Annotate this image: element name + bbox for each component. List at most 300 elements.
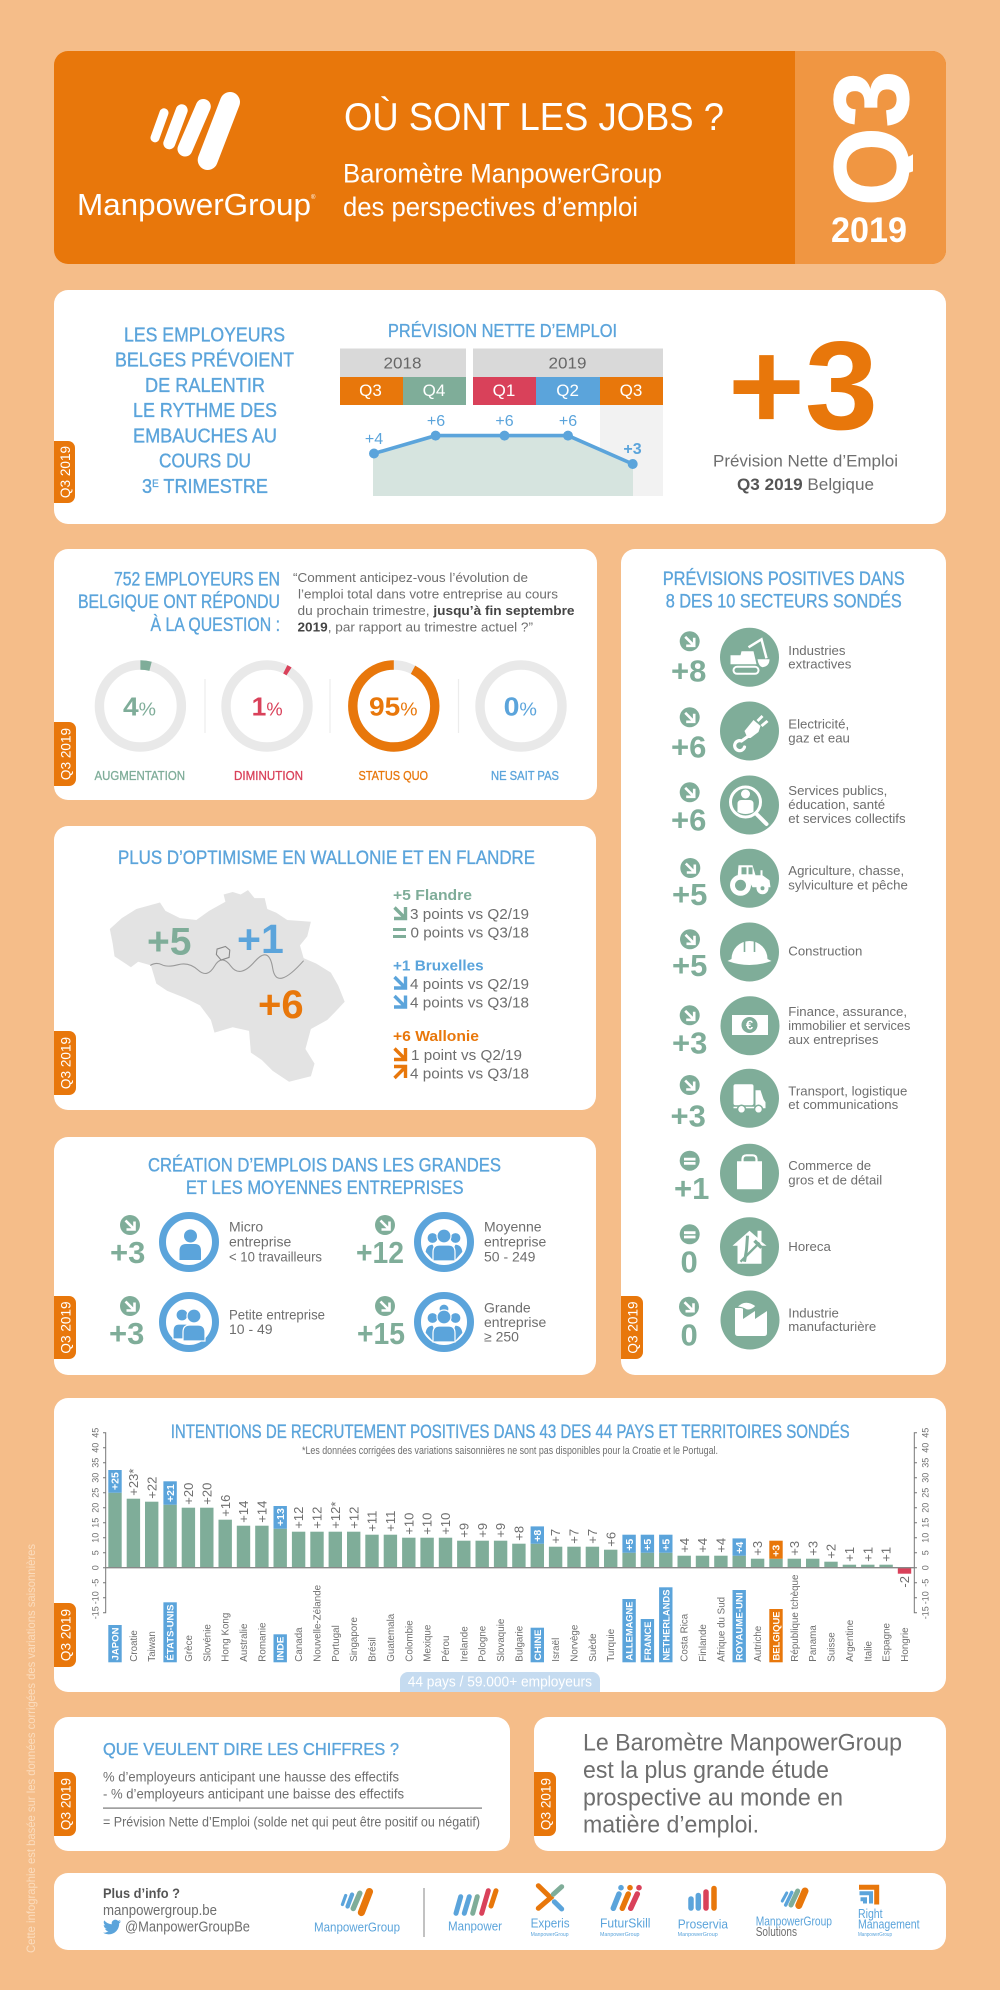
- bar: Autriche +3: [750, 1541, 765, 1662]
- tab: Q3 2019: [54, 1603, 76, 1667]
- title: OÙ SONT LES JOBS ?: [344, 96, 724, 139]
- logo: Right Management: ManpowerGroup: [858, 1932, 892, 1938]
- sector: Services publics: [671, 776, 906, 838]
- bar: Japon +25: [108, 1470, 122, 1662]
- panel: barometer statement: [534, 1717, 946, 1851]
- item: small enterprise +3: +3: [109, 1316, 144, 1351]
- bar: Hong Kong +16: Hong Kong: [221, 1613, 232, 1662]
- bar: Irelande +9: Irelande: [459, 1626, 470, 1662]
- left axis: 25: [90, 1488, 100, 1498]
- donut: augmentation 4%: [94, 665, 185, 783]
- sector: Industrie manufacturière: manufacturière: [788, 1319, 876, 1334]
- heading: employers slowing hiring: E: [152, 478, 159, 490]
- line chart with quarter table: 2019: [548, 356, 587, 372]
- logo: Right Management: Management: [858, 1916, 920, 1931]
- bar: Nouvelle-Zélande +12: +12: [310, 1507, 325, 1529]
- logo: Experis: [531, 1886, 570, 1938]
- statement text: est la plus grande étude: [583, 1757, 829, 1784]
- contact info: Plus d’info ?: [103, 1885, 180, 1901]
- bar: Royaume-Uni +4: ROYAUME-UNI: [735, 1592, 746, 1660]
- bar: Australie +14: Australie: [239, 1623, 250, 1662]
- caption for big number: Q3 2019 Belgique: [737, 476, 874, 494]
- bar: Chine +8: [531, 1526, 544, 1662]
- bar: Romanie +14: [254, 1501, 270, 1662]
- panel: regional map: [54, 826, 596, 1110]
- logo: Experis: Experis: [531, 1915, 570, 1930]
- bar: Netherlands +5: +5: [660, 1539, 672, 1551]
- bar: Pologne +9: Pologne: [478, 1625, 489, 1662]
- legend: Bruxelles: +1 Bruxelles: [393, 958, 484, 974]
- bar: Royaume-Uni +4: +4: [734, 1542, 746, 1554]
- heading: employers slowing hiring: COURS DU: [159, 451, 251, 473]
- bar: Slovaquie +9: +9: [493, 1523, 508, 1538]
- item: large enterprise +15: Grande: [484, 1299, 531, 1315]
- heading: 752 employers: [78, 570, 280, 636]
- heading: job creation by size: [148, 1156, 501, 1199]
- ManpowerGroup wordmark: ManpowerGroup: [77, 187, 311, 222]
- panel: world chart: [54, 1398, 946, 1692]
- item: large enterprise +15: +15: [357, 1316, 405, 1351]
- heading: job creation by size: ET LES MOYENNES ENTREPRISES: [186, 1178, 464, 1199]
- right axis: 25: [920, 1488, 930, 1498]
- chart note: *Les données corrigées des variations saisonnières ne sont pas disponibles pour la Croatie et le Portugal.: [302, 1445, 718, 1457]
- left axis: 5: [90, 1550, 100, 1555]
- donut: status quo 95%: STATUS QUO: [358, 769, 428, 783]
- bar: Finlande +4: Finlande: [698, 1624, 709, 1662]
- bar: Belgique +3: BELGIQUE: [772, 1611, 782, 1660]
- right axis: -15: [920, 1606, 930, 1619]
- bar: Costa Rica +4: [677, 1538, 692, 1662]
- sector: Commerce: [674, 1144, 882, 1206]
- logo: Right Management: Right: [858, 1906, 883, 1921]
- subtitle: Baromètre ManpowerGroup: [343, 158, 662, 188]
- bar: Guatemala +11: Guatemala: [386, 1613, 397, 1662]
- bar: Belgique +3: [769, 1541, 783, 1662]
- bar: Hongrie -2: Hongrie: [900, 1627, 911, 1662]
- right axis: -5: [920, 1579, 930, 1587]
- bar: Slovaquie +9: Slovaquie: [496, 1618, 507, 1662]
- bar: Pérou +10: [438, 1513, 453, 1662]
- line chart with quarter table: Q2: [556, 381, 579, 400]
- tab: Q3 2019: [621, 1296, 643, 1359]
- bar chart: 44 countries: [106, 1469, 914, 1662]
- sector: Industrie manufacturière: [679, 1290, 876, 1353]
- donut: diminution 1%: 1%: [252, 692, 283, 722]
- bar: Costa Rica +4: +4: [677, 1538, 692, 1553]
- item: large enterprise +15: [357, 1296, 546, 1351]
- survey question quote: l’emploi total dans votre entreprise au cours: [298, 586, 558, 602]
- bar: Grèce +20: [181, 1483, 196, 1662]
- logo: ManpowerGroup: ManpowerGroup: [314, 1920, 400, 1935]
- bar: Canada +12: Canada: [294, 1627, 305, 1662]
- item: large enterprise +15: entreprise: [484, 1314, 546, 1330]
- left axis: 10: [90, 1533, 100, 1543]
- bar: Inde +13: [274, 1506, 287, 1662]
- bar: Argentine +1: +1: [842, 1547, 857, 1562]
- sector: Industries extractives: Industries: [788, 643, 846, 658]
- heading: employers slowing hiring: BELGES PRÉVOIENT: [115, 349, 294, 372]
- bar: Italie +1: [860, 1547, 875, 1662]
- donut: ne sait pas 0%: 0%: [504, 692, 537, 722]
- bar: Israël +7: +7: [548, 1529, 563, 1544]
- bar: Portugal +12*: +12*: [328, 1502, 343, 1529]
- heading: employers slowing hiring: TRIMESTRE: [159, 476, 268, 498]
- bar: Australie +14: +14: [236, 1501, 251, 1523]
- bar: Brésil +11: +11: [365, 1511, 380, 1532]
- legend: Wallonie: 4 points vs Q3/18: [410, 1066, 529, 1082]
- bar: Suisse +2: Suisse: [826, 1632, 838, 1662]
- legend: Bruxelles: 4 points vs Q3/18: [410, 995, 529, 1012]
- bar: Israël +7: [548, 1529, 563, 1662]
- ManpowerGroup wordmark: ®: [311, 194, 316, 201]
- bar: Mexique +10: Mexique: [423, 1624, 434, 1662]
- tab: Q3 2019: [54, 1772, 76, 1836]
- bar: Croatie +23*: [126, 1469, 141, 1662]
- bar: Norvège +7: +7: [567, 1529, 582, 1544]
- donut: diminution 1%: DIMINUTION: [234, 769, 303, 783]
- panel: sectors: [621, 549, 946, 1375]
- logo: Proservia: [678, 1888, 729, 1938]
- sector: Services publics: et services collectifs: [788, 811, 906, 826]
- bar: Grèce +20: Grèce: [184, 1634, 195, 1662]
- right axis: 0: [920, 1565, 930, 1570]
- logo: FuturSkill: [600, 1885, 651, 1938]
- bar: Netherlands +5: [659, 1535, 672, 1662]
- line chart with quarter table: +6: [427, 413, 445, 430]
- survey question quote: 2019, par rapport au trimestre actuel ?”: [298, 620, 533, 635]
- sector: Electricité, gaz et eau: +6: [671, 729, 706, 764]
- sector: Services publics: +6: [671, 803, 706, 838]
- bar: Grèce +20: +20: [181, 1483, 196, 1505]
- line chart with quarter table: [340, 348, 663, 496]
- legend: Flandre: 3 points vs Q2/19: [410, 906, 529, 923]
- sector: Industries extractives: extractives: [788, 657, 852, 672]
- icon: ManpowerGroup logo mark: [155, 102, 230, 160]
- bar: Colombie +10: +10: [401, 1513, 416, 1535]
- left axis: 35: [90, 1458, 100, 1468]
- map of Belgium: [110, 890, 345, 1082]
- bar: Suisse +2: +2: [824, 1544, 839, 1559]
- sector: Transport: Transport, logistique: [788, 1084, 907, 1099]
- logo: ManpowerGroup: [314, 1892, 400, 1935]
- survey question quote: [293, 570, 574, 635]
- heading: sectors: PRÉVISIONS POSITIVES DANS: [663, 569, 905, 590]
- bar: Bulgarie +8: +8: [512, 1526, 526, 1541]
- item: medium enterprise +12: [356, 1215, 546, 1270]
- sector: Agriculture: sylviculture et pêche: [788, 877, 908, 892]
- bar: Croatie +23*: +23*: [126, 1469, 141, 1496]
- contact info: [103, 1885, 250, 1936]
- survey question quote: “Comment anticipez-vous l’évolution de: [293, 570, 528, 585]
- bar: Nouvelle-Zélande +12: [310, 1507, 325, 1662]
- left axis: 20: [90, 1503, 100, 1513]
- line chart with quarter table: Q3: [620, 381, 642, 400]
- sector: Industries extractives: [671, 628, 852, 689]
- formula text: [103, 1770, 482, 1830]
- tab: Q3 2019: Q3 2019: [58, 1301, 74, 1354]
- right axis: 5: [920, 1550, 930, 1555]
- icon: twitter: [103, 1920, 121, 1934]
- line chart with quarter table: 2018: [384, 356, 422, 372]
- heading: job creation by size: CRÉATION D’EMPLOIS DANS LES GRANDES: [148, 1156, 501, 1177]
- sector: Finance: aux entreprises: [788, 1032, 879, 1047]
- legend: Bruxelles: [393, 958, 529, 1012]
- bar: Autriche +3: Autriche: [753, 1625, 764, 1662]
- panel: what the figures mean: [54, 1717, 510, 1851]
- donut: augmentation 4%: AUGMENTATION: [94, 769, 185, 783]
- bar: Belgique +3: +3: [771, 1545, 783, 1557]
- bar: Slovénie +20: Slovénie: [202, 1624, 213, 1662]
- bar: Taiwan +22: Taiwan: [147, 1631, 158, 1662]
- bar: Inde +13: +13: [275, 1508, 287, 1526]
- logo: ManpowerGroup Solutions: ManpowerGroup: [756, 1914, 832, 1929]
- item: micro enterprise +3: Micro: [229, 1219, 263, 1235]
- bar: Colombie +10: Colombie: [404, 1620, 415, 1662]
- item: medium enterprise +12: +12: [356, 1235, 404, 1270]
- bar: Bulgarie +8: [512, 1526, 526, 1662]
- right axis: [914, 1428, 930, 1619]
- bar: Bulgarie +8: Bulgarie: [514, 1625, 525, 1662]
- bar: Nouvelle-Zélande +12: Nouvelle-Zélande: [312, 1584, 324, 1662]
- line chart with quarter table: Q1: [493, 381, 515, 400]
- logo: FuturSkill: ManpowerGroup: [600, 1932, 640, 1938]
- right axis: 35: [920, 1458, 930, 1468]
- bar: Pérou +10: +10: [438, 1513, 453, 1535]
- sector: Finance: Finance, assurance,: [788, 1004, 907, 1019]
- bar: France +5: [641, 1535, 654, 1662]
- left axis: -15: [90, 1606, 100, 1619]
- sector: Transport: [670, 1069, 907, 1134]
- sector: Industries extractives: +8: [671, 654, 706, 689]
- bar: Mexique +10: [420, 1513, 435, 1662]
- left axis: 0: [90, 1565, 100, 1570]
- bar: Suède +7: +7: [585, 1529, 600, 1544]
- bar: Autriche +3: +3: [750, 1541, 765, 1556]
- logo: Right Management: [858, 1887, 920, 1938]
- sector: Transport: +3: [670, 1099, 706, 1134]
- heading: employers slowing hiring: 3: [142, 476, 153, 498]
- right axis: 15: [920, 1518, 930, 1528]
- bar: Brésil +11: [365, 1511, 380, 1662]
- sector: Industrie manufacturière: Industrie: [788, 1305, 839, 1320]
- legend: Wallonie: 1 point vs Q2/19: [411, 1047, 522, 1064]
- bar: Brésil +11: Brésil: [368, 1637, 378, 1662]
- sector: Transport: et communications: [788, 1097, 899, 1112]
- left axis: 40: [90, 1443, 100, 1453]
- item: medium enterprise +12: 50 - 249: [484, 1249, 536, 1265]
- bar: Irelande +9: +9: [456, 1523, 471, 1538]
- bar: Mexique +10: +10: [420, 1513, 435, 1535]
- sector: Services publics: éducation, santé: [788, 797, 885, 812]
- survey question quote: du prochain trimestre, jusqu’à fin septembre: [298, 603, 574, 618]
- bar: Panama +3: Panama: [808, 1625, 819, 1662]
- sector: Agriculture: +5: [672, 877, 707, 912]
- bar: Panama +3: [805, 1541, 820, 1662]
- logo: ManpowerGroup Solutions: Solutions: [756, 1924, 797, 1939]
- bar: Croatie +23*: Croatie: [129, 1630, 140, 1662]
- bar: Inde +13: INDE: [276, 1636, 287, 1660]
- item: small enterprise +3: 10 - 49: [229, 1321, 273, 1337]
- bar: Panama +3: +3: [805, 1541, 820, 1556]
- bar: Turquie +6: [603, 1532, 618, 1662]
- item: small enterprise +3: [109, 1296, 325, 1351]
- bar: République tchèque +3: +3: [787, 1541, 802, 1556]
- item: medium enterprise +12: Moyenne: [484, 1219, 542, 1235]
- logo: Proservia: Proservia: [678, 1916, 729, 1931]
- bar: Royaume-Uni +4: [732, 1538, 746, 1662]
- bar: Afrique du Sud +4: +4: [714, 1538, 728, 1553]
- left axis: -5: [90, 1579, 100, 1587]
- panel: national forecast: [54, 290, 946, 524]
- heading: que veulent dire les chiffres: QUE VEULENT DIRE LES CHIFFRES ?: [103, 1739, 399, 1759]
- contact info: manpowergroup.be: [103, 1903, 217, 1919]
- sector: Horeca: 0: [680, 1244, 698, 1279]
- heading: optimism in Wallonia and Flanders: PLUS D’OPTIMISME EN WALLONIE ET EN FLANDRE: [118, 847, 535, 869]
- bar: Allemagne +5: ALLEMAGNE: [625, 1601, 636, 1660]
- bar: Norvège +7: Norvège: [570, 1624, 580, 1662]
- bar: Espagne +1: [879, 1547, 894, 1662]
- line chart with quarter table: Q3: [359, 381, 382, 400]
- bar: Espagne +1: Espagne: [882, 1622, 893, 1662]
- bar: Allemagne +5: +5: [624, 1539, 636, 1551]
- sector: Services publics: Services publics,: [788, 783, 887, 798]
- bar: Romanie +14: Romanie: [257, 1622, 268, 1662]
- line chart with quarter table: +4: [365, 431, 383, 448]
- bar: Allemagne +5: [622, 1535, 636, 1662]
- line chart with quarter table: +6: [559, 413, 577, 430]
- bar: Argentine +1: Argentine: [845, 1619, 856, 1662]
- bar: France +5: +5: [642, 1539, 654, 1551]
- tab: Q3 2019: [54, 441, 75, 503]
- right axis: 40: [920, 1443, 930, 1453]
- item: medium enterprise +12: entreprise: [484, 1234, 546, 1250]
- sector: Finance: [672, 996, 911, 1060]
- item: micro enterprise +3: < 10 travailleurs: [229, 1249, 322, 1265]
- legend: Wallonie: +6 Wallonie: [393, 1029, 479, 1045]
- legend: Bruxelles: 4 points vs Q2/19: [410, 976, 529, 993]
- pill: 44 pays / 59.000+ employeurs: 44 pays / 59.000+ employeurs: [408, 1675, 592, 1691]
- bar: Taiwan +22: [144, 1477, 159, 1662]
- bar: Pologne +9: +9: [475, 1523, 490, 1538]
- bar: Australie +14: [236, 1501, 251, 1662]
- bar: États-Unis +21: +21: [165, 1484, 177, 1502]
- bar: Canada +12: +12: [291, 1507, 306, 1529]
- bar: Espagne +1: +1: [879, 1547, 894, 1562]
- heading: Prévision nette d'emploi: PRÉVISION NETTE D’EMPLOI: [388, 320, 617, 341]
- left axis: 45: [90, 1428, 100, 1438]
- value +5 Flandre: +5: [147, 920, 191, 964]
- tab: Q3 2019: Q3 2019: [58, 1609, 74, 1661]
- bar: Argentine +1: [842, 1547, 857, 1662]
- formula text: = Prévision Nette d’Emploi (solde net qui peut être positif ou négatif): [103, 1815, 480, 1830]
- logo: Proservia: ManpowerGroup: [678, 1932, 718, 1938]
- bar: Suède +7: [585, 1529, 600, 1662]
- tab: Q3 2019: [54, 1031, 76, 1095]
- tab: Q3 2019: [54, 1296, 76, 1359]
- heading: sectors: [663, 569, 905, 613]
- tab: Q3 2019: Q3 2019: [58, 1037, 74, 1089]
- bar: Canada +12: [291, 1507, 306, 1662]
- right axis: 10: [920, 1533, 930, 1543]
- sector: Finance: +3: [672, 1025, 707, 1060]
- bar: Afrique du Sud +4: Afrique du Sud: [716, 1597, 727, 1662]
- bar: Slovaquie +9: [493, 1523, 508, 1662]
- sector: Commerce: Commerce de: [788, 1158, 871, 1173]
- statement text: matière d’emploi.: [583, 1812, 759, 1839]
- right axis: 45: [920, 1428, 930, 1438]
- bar: Romanie +14: +14: [254, 1501, 270, 1523]
- left axis: [90, 1428, 106, 1619]
- bar: Suisse +2: [824, 1544, 839, 1662]
- sector: Construction: [672, 922, 862, 983]
- bar: Guatemala +11: [383, 1511, 398, 1662]
- bar: Pérou +10: Pérou: [441, 1636, 452, 1662]
- bar: République tchèque +3: [787, 1541, 802, 1662]
- sector: Electricité, gaz et eau: gaz et eau: [788, 731, 850, 746]
- panel: company size: [54, 1137, 596, 1375]
- year label 2019: 2019: [831, 211, 907, 250]
- right axis: 20: [920, 1503, 930, 1513]
- bar: Costa Rica +4: Costa Rica: [680, 1613, 691, 1662]
- tab: Q3 2019: Q3 2019: [58, 1778, 74, 1830]
- bar: Netherlands +5: NETHERLANDS: [661, 1589, 672, 1660]
- bar: Italie +1: +1: [860, 1547, 875, 1562]
- bar: Finlande +4: [695, 1538, 710, 1662]
- bar: États-Unis +21: [163, 1481, 177, 1662]
- line chart with quarter table: +3: [623, 441, 642, 458]
- vertical footnote: Cette infographie est basée sur les données corrigées des variations saisonnières: [24, 1544, 38, 1953]
- left axis: 30: [90, 1473, 100, 1483]
- big number +3: +3: [728, 315, 878, 456]
- panel: 752 employers survey: [54, 549, 597, 800]
- bar: Portugal +12*: [328, 1502, 343, 1662]
- bar: Japon +25: +25: [110, 1472, 122, 1490]
- donut: status quo 95%: 95%: [369, 692, 418, 722]
- bar: République tchèque +3: République tchèque: [790, 1574, 801, 1662]
- sector: Commerce: +1: [674, 1171, 709, 1206]
- heading: 752 employers: BELGIQUE ONT RÉPONDU: [78, 592, 280, 613]
- bar: Israël +7: Israël: [551, 1638, 562, 1662]
- sector: Agriculture: Agriculture, chasse,: [788, 863, 904, 878]
- bar: Hong Kong +16: +16: [218, 1495, 233, 1517]
- bar: Singapore +12: +12: [346, 1507, 361, 1529]
- line chart with quarter table: Q4: [423, 381, 445, 400]
- logo: FuturSkill: FuturSkill: [600, 1915, 651, 1930]
- sector: Industrie manufacturière: 0: [680, 1318, 698, 1353]
- line chart with quarter table: +6: [495, 413, 514, 430]
- right axis: -10: [920, 1591, 930, 1604]
- bar: Turquie +6: +6: [603, 1532, 618, 1547]
- legend: Flandre: 0 points vs Q3/18: [410, 924, 529, 942]
- bar: Norvège +7: [567, 1529, 582, 1662]
- sector: Commerce: gros et de détail: [788, 1172, 882, 1187]
- item: small enterprise +3: Petite entreprise: [229, 1306, 325, 1322]
- subtitle: des perspectives d’emploi: [343, 192, 638, 222]
- bar: Pologne +9: [475, 1523, 490, 1662]
- item: micro enterprise +3: entreprise: [229, 1234, 291, 1250]
- bar: Irelande +9: [456, 1523, 471, 1662]
- tab: Q3 2019: Q3 2019: [538, 1778, 554, 1830]
- bar: Chine +8: CHINE: [533, 1629, 544, 1660]
- donut: augmentation 4%: 4%: [123, 692, 156, 722]
- bar: Chine +8: +8: [532, 1530, 544, 1542]
- item: micro enterprise +3: +3: [110, 1235, 145, 1270]
- sector: Finance: immobilier et services: [788, 1018, 911, 1033]
- bar: Italie +1: Italie: [863, 1640, 874, 1662]
- caption for big number: [713, 453, 898, 494]
- header banner: [54, 51, 946, 264]
- bar: Finlande +4: +4: [695, 1538, 710, 1553]
